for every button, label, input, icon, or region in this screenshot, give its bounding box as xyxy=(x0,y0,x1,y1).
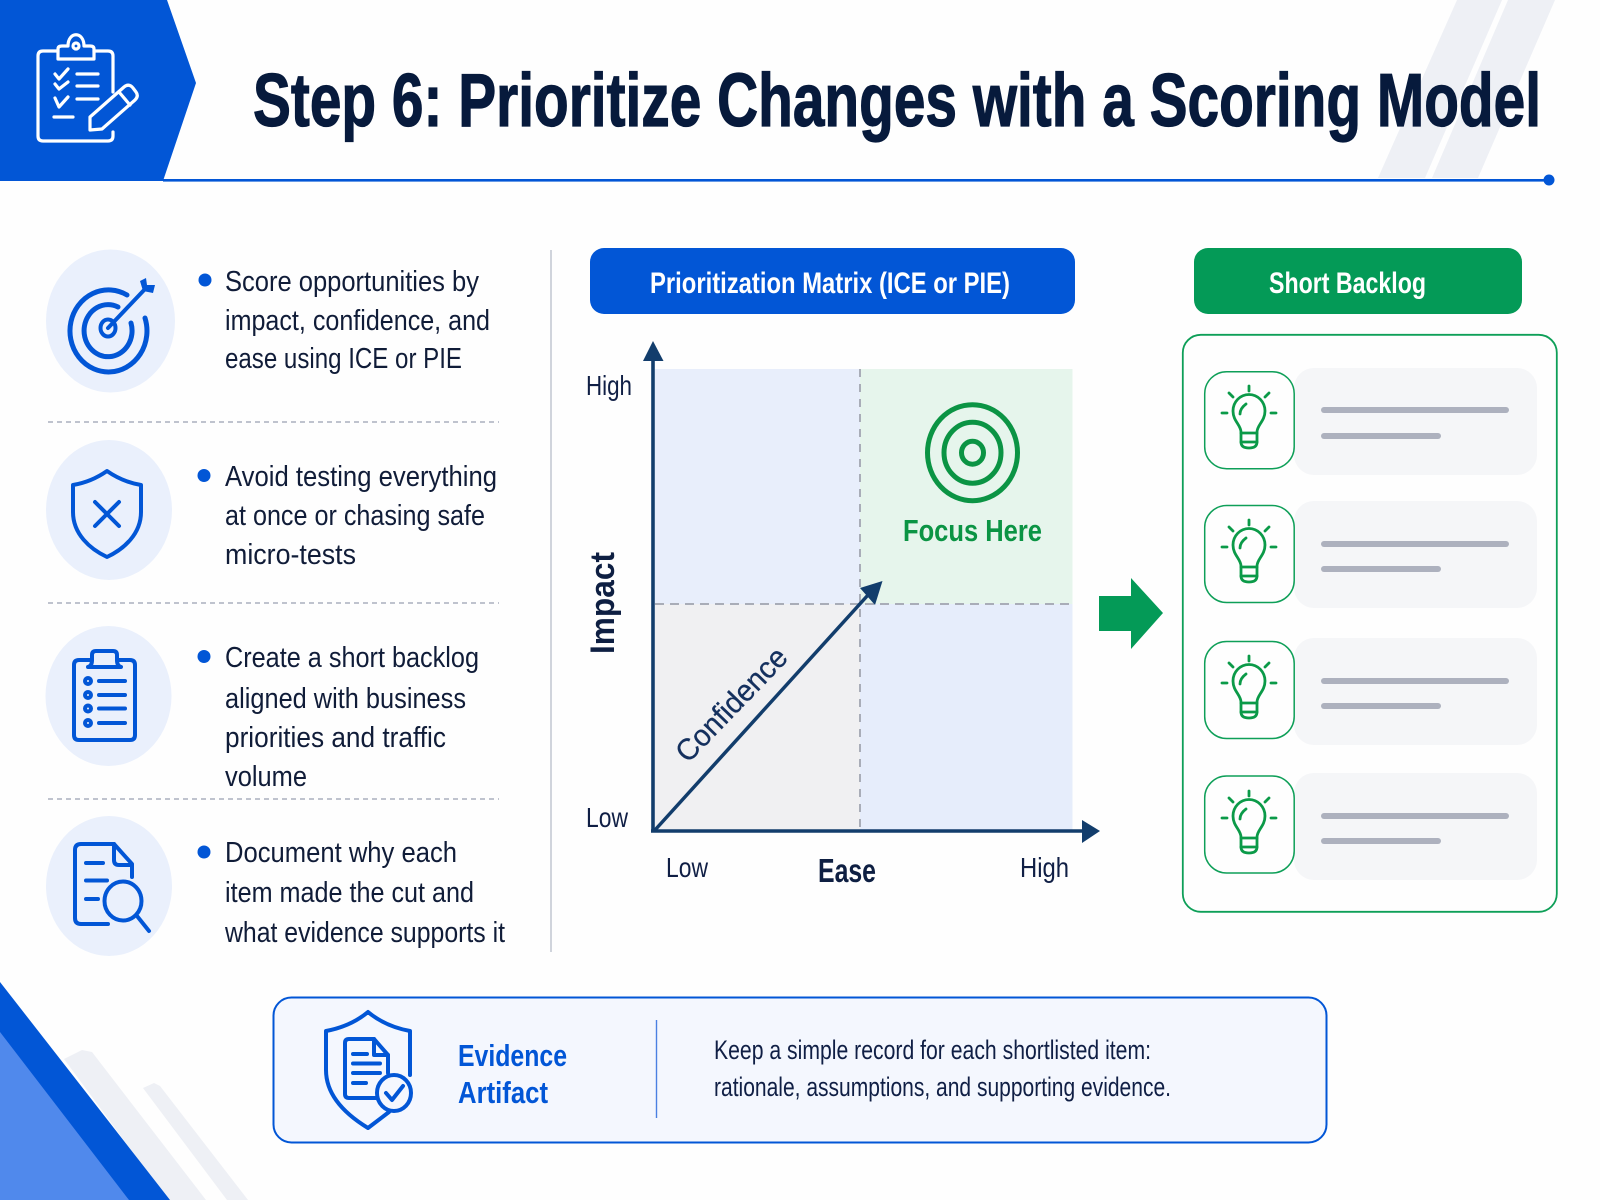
arrow: confidence: Confidence xyxy=(669,641,794,769)
backlog row 3 xyxy=(1205,638,1537,745)
item: document why xyxy=(46,816,505,956)
text: evidence description xyxy=(714,1035,1171,1102)
corner decoration xyxy=(0,982,170,1200)
item: create short backlog: Create a short backlog xyxy=(225,642,479,674)
heading: short backlog: Short Backlog xyxy=(1269,267,1426,300)
item: avoid testing everything: Avoid testing everything xyxy=(225,461,497,493)
text: evidence description: Keep a simple record for each shortlisted item: xyxy=(714,1035,1151,1065)
heading: prioritization matrix xyxy=(590,248,1075,314)
icon: shield with document xyxy=(326,1012,411,1128)
axis: ease: High xyxy=(1020,852,1069,883)
item: create short backlog: priorities and traffic xyxy=(225,722,446,754)
axis: ease xyxy=(651,820,1100,889)
heading: prioritization matrix: Prioritization Matrix (ICE or PIE) xyxy=(650,267,1010,300)
arrow: matrix to backlog xyxy=(1099,578,1163,649)
panel: backlog list xyxy=(1183,335,1557,912)
text: evidence description: rationale, assumptions, and supporting evidence. xyxy=(714,1072,1171,1102)
arrow: confidence xyxy=(655,581,882,830)
item: create short backlog: volume xyxy=(225,761,307,793)
chart: prioritization matrix xyxy=(584,341,1100,889)
icon: clipboard and pencil xyxy=(38,35,137,141)
backlog row 1 xyxy=(1205,368,1537,475)
header banner xyxy=(0,0,1554,186)
label: evidence artifact xyxy=(458,1038,567,1110)
backlog row 4 xyxy=(1205,773,1537,880)
item: score opportunities: ease using ICE or PIE xyxy=(225,343,462,375)
backlog row 2 xyxy=(1205,501,1537,608)
item: score opportunities xyxy=(46,250,490,392)
item: score opportunities: Score opportunities by xyxy=(225,266,479,298)
item: create short backlog xyxy=(46,626,479,793)
item: avoid testing everything: micro-tests xyxy=(225,539,356,571)
item: document why: what evidence supports it xyxy=(224,917,505,949)
item: document why: item made the cut and xyxy=(225,877,474,909)
axis: ease: Low xyxy=(666,852,709,883)
item: score opportunities: impact, confidence, and xyxy=(225,305,490,337)
item: create short backlog: aligned with business xyxy=(225,683,466,715)
label: focus here: Focus Here xyxy=(903,513,1042,548)
label: evidence artifact: Artifact xyxy=(458,1075,548,1110)
axis: impact: Low xyxy=(586,802,629,833)
panel: guidance list xyxy=(46,250,505,956)
axis: impact xyxy=(584,341,664,833)
axis: impact: High xyxy=(586,370,632,401)
heading: short backlog xyxy=(1194,248,1522,314)
axis: impact: Impact xyxy=(584,552,622,654)
item: document why: Document why each xyxy=(225,837,457,869)
quadrants xyxy=(655,369,1072,830)
item: avoid testing everything xyxy=(46,440,497,580)
icon: focus target xyxy=(928,405,1018,501)
item: avoid testing everything: at once or chasing safe xyxy=(225,500,485,532)
panel: evidence artifact xyxy=(274,998,1326,1142)
axis: ease: Ease xyxy=(818,852,876,889)
label: evidence artifact: Evidence xyxy=(458,1038,567,1073)
